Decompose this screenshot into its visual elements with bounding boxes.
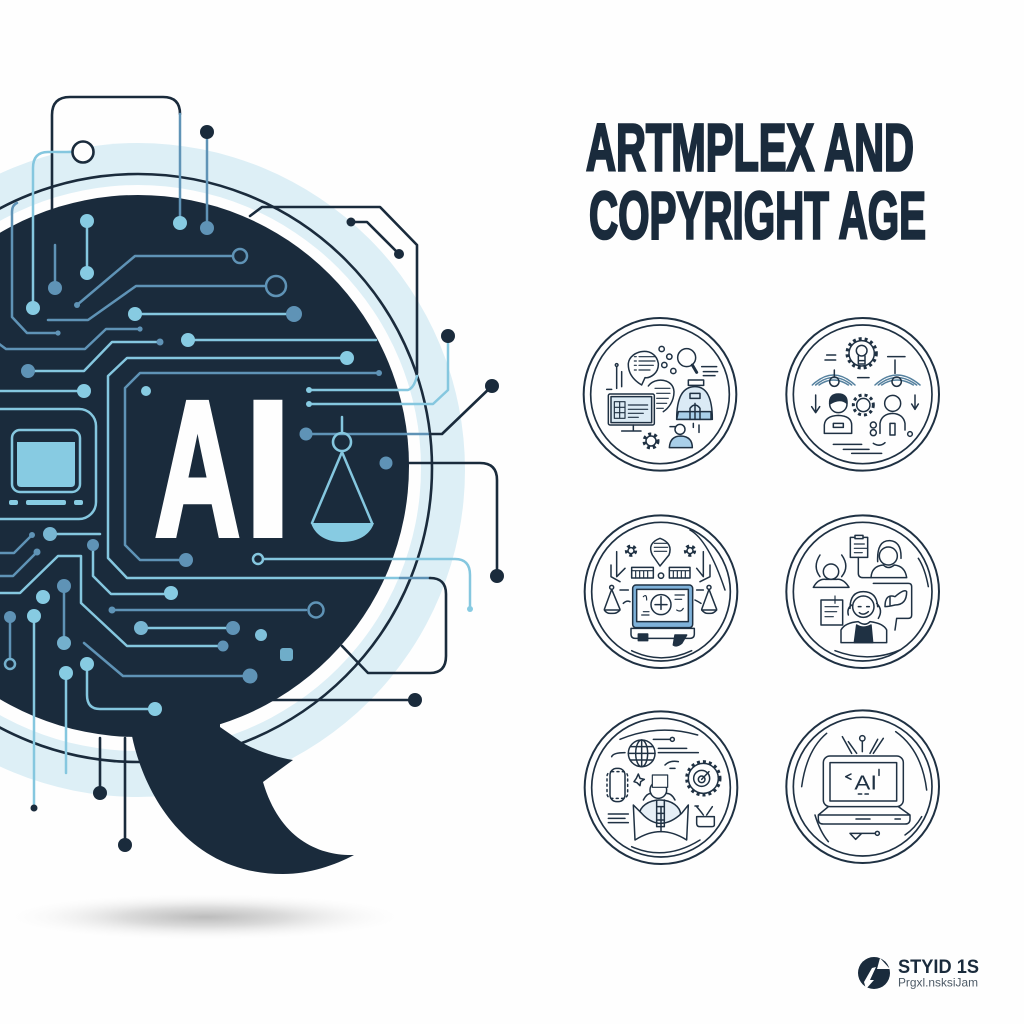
icon badge 1: chat, monitor and user [584, 318, 736, 471]
title [586, 111, 926, 254]
icon: balance scale [311, 417, 374, 542]
AI lettering: A [155, 361, 240, 576]
pale blue halo [0, 143, 465, 797]
circuit traces, top [0, 97, 376, 398]
icon: chip with screen [0, 409, 96, 519]
icon badge 6: laptop with AI [786, 710, 939, 863]
outer thin ring [0, 174, 432, 762]
icon badge 2: ideas, eyes and people [786, 318, 939, 471]
logo tagline: Prgxl.nsksiJam [898, 976, 978, 990]
logo [858, 957, 979, 990]
logo name: STYID 1S [898, 957, 979, 978]
icon badge 4: people and notes [786, 515, 939, 668]
bubble tail [132, 700, 354, 874]
circuit traces, octagon frames around AI [108, 351, 446, 673]
dark bubble disc [0, 195, 409, 737]
ground shadow [0, 893, 410, 941]
logo mark [858, 957, 890, 989]
speech bubble emblem [0, 143, 465, 874]
icon badge 5: globe, gear and reader [585, 711, 737, 864]
circuit traces, right side [250, 207, 504, 707]
AI lettering: I [240, 356, 296, 581]
icon badge 3: laptop, clock and scales [585, 515, 737, 668]
white gap ring [0, 185, 421, 751]
circuit traces, lower left [0, 527, 324, 852]
icon badge 6: laptop with AI: AI [854, 771, 877, 794]
